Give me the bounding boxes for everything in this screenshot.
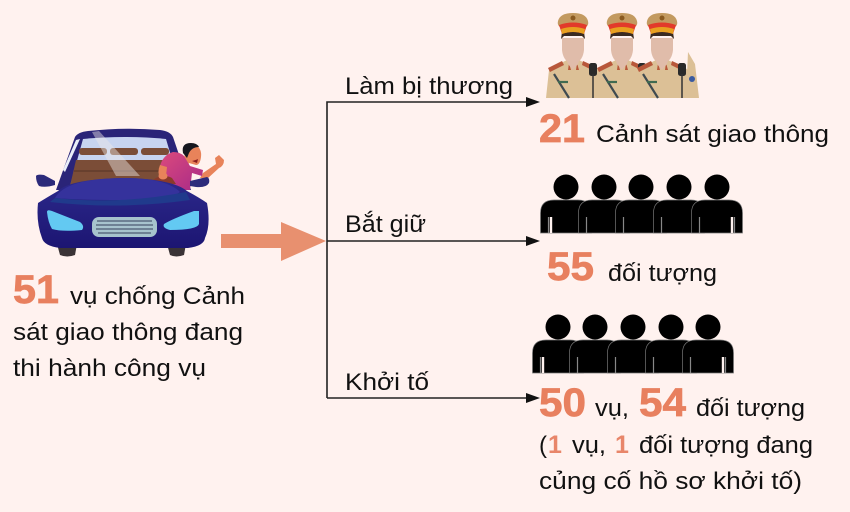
main arrow [221,222,326,261]
text: 50 cases, 54 suspects: đối tượng [696,395,805,422]
text: 21 officers [539,107,829,151]
branch lines [327,97,540,403]
icon: five people, prosecuted [532,314,734,373]
text: remaining case note: củng cố hồ sơ khởi tố) [539,468,802,495]
text: 55 suspects: 55 [547,245,594,289]
text: remaining case note [539,431,813,495]
rear window and glass [70,137,180,186]
text: remaining case note: ( [539,432,547,459]
text: remaining case note: 1 [615,431,629,459]
text: 21 officers: 21 [539,107,585,151]
text: 50 cases, 54 suspects: 54 [639,381,687,425]
text: 51 incidents: vụ chống Cảnh [70,283,245,310]
text: remaining case note: vụ, [572,432,606,459]
body [38,178,209,248]
text: 51 incidents [13,268,245,382]
text: 51 incidents: 51 [13,268,59,312]
icon: car with angry driver [36,129,224,256]
icon: five people, arrested [540,174,742,233]
driver [200,155,224,179]
hood [55,178,180,200]
wheels [57,244,77,256]
text: 55 suspects [547,245,717,289]
text: 51 incidents: thi hành công vụ [13,355,206,382]
third officer sleeve and badge [686,52,699,98]
cabin frame [56,129,191,190]
label: arrested: Bắt giữ [345,211,426,238]
seats [70,160,178,186]
text: remaining case note: đối tượng đang [639,432,813,459]
text: 50 cases, 54 suspects: 50 [539,381,586,425]
icon: three traffic police officers [546,13,699,98]
headlights [47,210,83,231]
text: 21 officers: Cảnh sát giao thông [596,121,829,148]
label: wounded: Làm bị thương [345,73,513,100]
grille [92,217,157,237]
right mirror [190,177,209,187]
left mirror [36,175,55,187]
windscreen reflection [92,131,140,176]
text: 50 cases, 54 suspects [539,381,805,425]
text: remaining case note: 1 [548,431,562,459]
text: 55 suspects: đối tượng [608,260,717,287]
label: prosecuted: Khởi tố [345,369,429,396]
text: 50 cases, 54 suspects: vụ, [595,395,629,422]
text: 51 incidents: sát giao thông đang [13,319,243,346]
